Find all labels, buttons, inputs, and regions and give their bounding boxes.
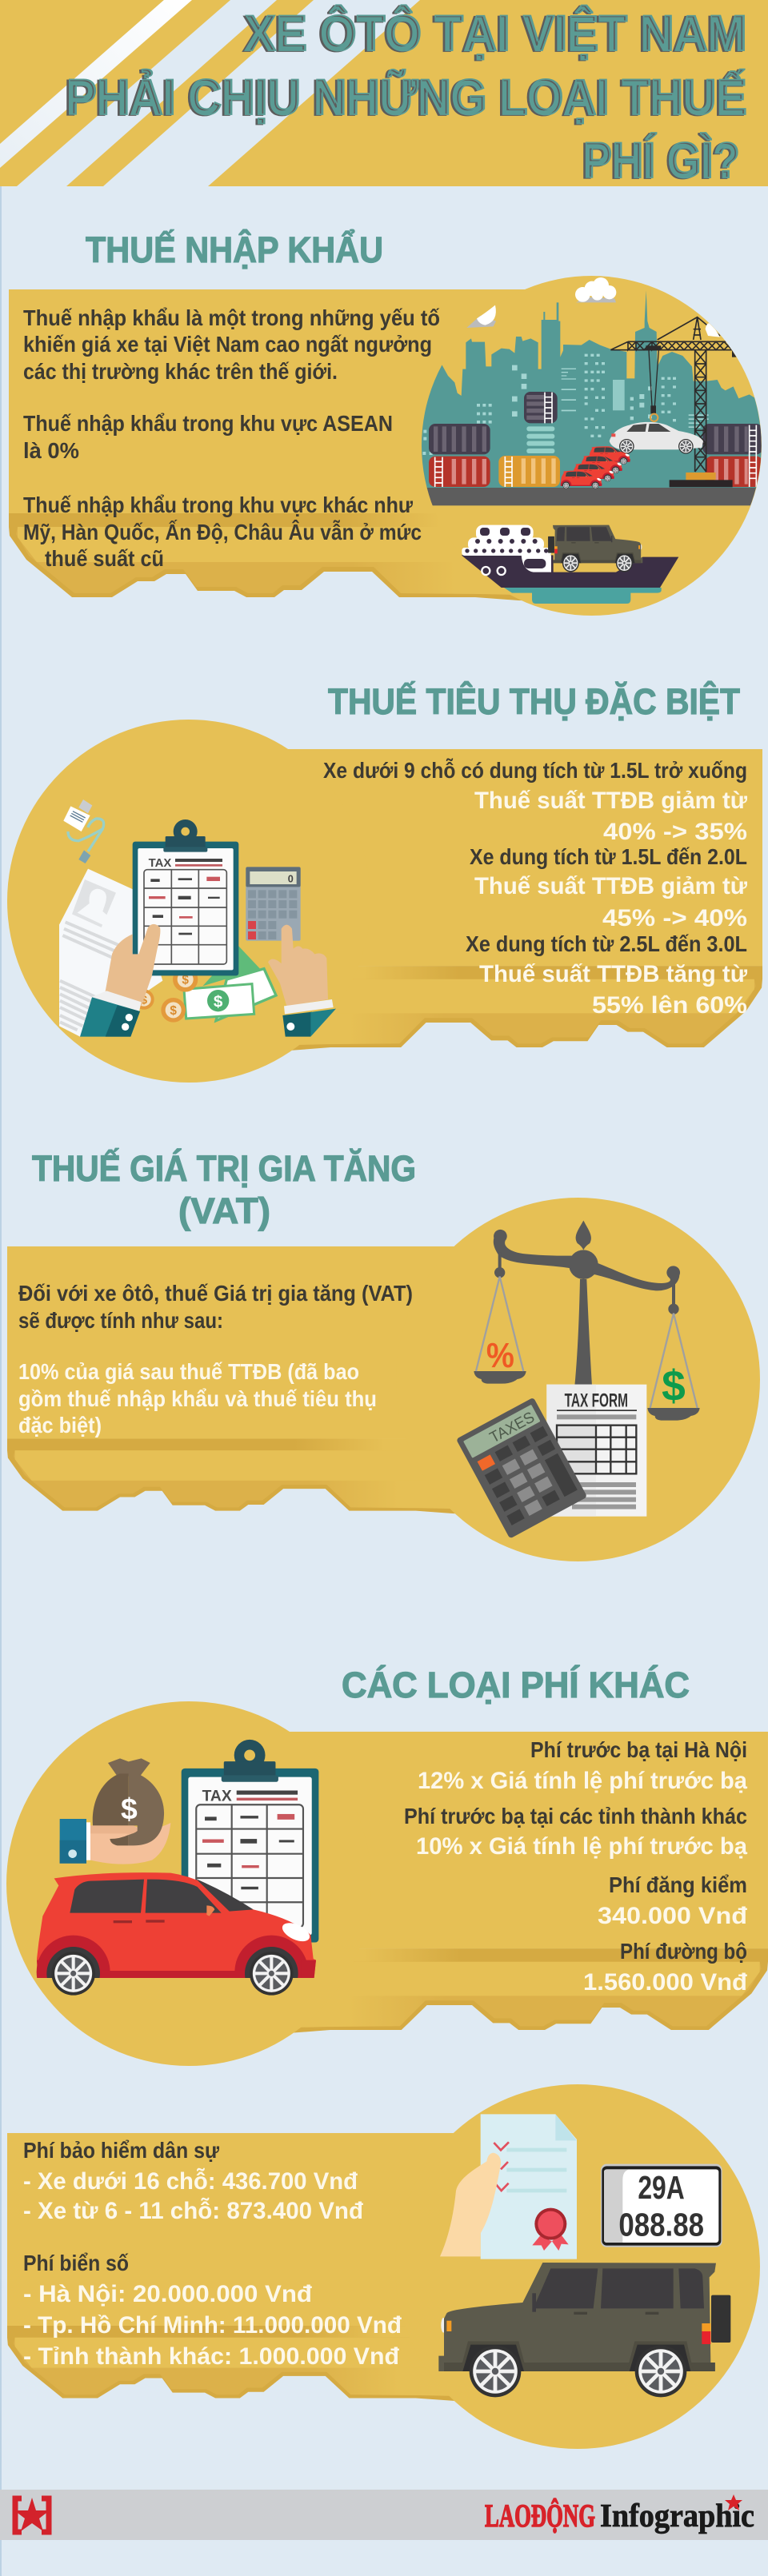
text: các loại phí khác: Phí đăng kiểm (609, 1872, 747, 1897)
text: phí bảo hiểm và biển số: - Hà Nội: 20.000.000 Vnđ (23, 2281, 313, 2307)
icon: left hand in sleeve (80, 924, 160, 1037)
text: phí bảo hiểm và biển số: - Xe từ 6 - 11 chỗ: 873.400 Vnđ (23, 2197, 364, 2224)
icon: calculator (246, 867, 301, 941)
title (66, 5, 747, 189)
text: thuế giá trị gia tăng (18, 1281, 413, 1438)
panel: các loại phí khác key (6, 1701, 768, 2066)
text: các loại phí khác: 10% x Giá tính lệ phí trước bạ (416, 1833, 747, 1860)
text: thuế tiêu thụ đặc biệt: 55% lên 60% (592, 992, 747, 1019)
text: các loại phí khác: 340.000 Vnđ (598, 1903, 748, 1929)
text: thuế tiêu thụ đặc biệt (323, 758, 747, 1019)
text: thuế tiêu thụ đặc biệt: 45% -> 40% (602, 905, 747, 931)
panel: phí bảo hiểm và biển số key (7, 2084, 760, 2449)
logo text: Lao Động Infographic: Infographic (600, 2497, 754, 2534)
icon: taxes calculator: TAXES (487, 1409, 538, 1446)
illustration: port with city, crane, cars and ship (416, 277, 768, 604)
text: các loại phí khác (404, 1737, 748, 1996)
illustration: scale, tax form and calculator (456, 1221, 700, 1539)
text: thuế nhập khẩu (23, 305, 440, 571)
icon: licence plate 29A 088.88: 088.88 (618, 2207, 704, 2243)
text: phí bảo hiểm và biển số: - Xe dưới 16 chỗ: 436.700 Vnđ (23, 2167, 358, 2195)
icon: insurance certificate held in hand (440, 2114, 577, 2259)
text: phí bảo hiểm và biển số: - Tp. Hồ Chí Minh: 11.000.000 Vnđ (23, 2312, 402, 2339)
text: thuế nhập khẩu: Mỹ, Hàn Quốc, Ấn Độ, Châu Âu vẫn ở mức (23, 520, 422, 544)
text: thuế giá trị gia tăng: sẽ được tính như sau: (18, 1308, 223, 1333)
icon: tax clipboard (133, 819, 238, 975)
logo text: Lao Động Infographic (485, 2494, 754, 2534)
text: các loại phí khác: Phí trước bạ tại các tỉnh thành khác (404, 1804, 747, 1828)
icon: right hand pointing (268, 925, 336, 1037)
icon: tax form (546, 1385, 646, 1517)
text: các loại phí khác: 12% x Giá tính lệ phí trước bạ (418, 1768, 747, 1794)
panel: thuế nhập khẩu key (9, 276, 768, 616)
icon: ship carrying jeep (462, 525, 678, 604)
heading: thuế giá trị gia tăng: THUẾ GIÁ TRỊ GIA TĂNG (32, 1148, 416, 1189)
illustration: scale, tax form and calculator: % (486, 1337, 514, 1375)
icon: row of red cars (561, 446, 630, 491)
text: phí bảo hiểm và biển số (23, 2138, 402, 2370)
text: thuế tiêu thụ đặc biệt: 40% -> 35% (603, 819, 747, 845)
icon: usb cable (63, 800, 104, 863)
footer band (0, 2490, 768, 2540)
icon: banknotes: $ (214, 992, 223, 1011)
text: phí bảo hiểm và biển số: Phí bảo hiểm dân sự (23, 2138, 219, 2163)
icon: gold coins: $ (141, 994, 147, 1007)
text: thuế giá trị gia tăng: đặc biệt) (18, 1413, 102, 1438)
heading: các loại phí khác: CÁC LOẠI PHÍ KHÁC (342, 1665, 690, 1705)
panel: thuế tiêu thụ đặc biệt key (7, 720, 762, 1083)
icon: white car on hook (610, 422, 703, 454)
text: thuế giá trị gia tăng: Đối với xe ôtô, thuế Giá trị gia tăng (VAT) (18, 1281, 413, 1306)
icon: tax clipboard (182, 1740, 318, 1942)
text: thuế tiêu thụ đặc biệt: Xe dung tích từ 1.5L đến 2.0L (470, 844, 747, 869)
illustration: certificate, licence plate and jeep (438, 2114, 730, 2397)
text: thuế nhập khẩu: thuế suất cũ (45, 546, 164, 571)
heading: thuế giá trị gia tăng (32, 1148, 416, 1231)
icon: hand holding money bag (60, 1758, 170, 1864)
text: các loại phí khác: Phí đường bộ (620, 1939, 747, 1964)
icon: jeep (438, 2263, 730, 2397)
text: phí bảo hiểm và biển số: Phí biển số (23, 2251, 129, 2275)
illustration: scale, tax form and calculator: $ (662, 1363, 686, 1410)
icon: red star logo (14, 2498, 50, 2532)
icon: hand holding money bag: $ (121, 1792, 138, 1825)
icon: licence plate 29A 088.88 (601, 2164, 722, 2247)
text: thuế nhập khẩu: các thị trường khác trên thế giới. (23, 359, 338, 384)
icon: taxes calculator (456, 1398, 587, 1539)
text: thuế giá trị gia tăng: gồm thuế nhập khẩu và thuế tiêu thụ (18, 1386, 377, 1411)
logo text: Lao Động Infographic: LAOĐỘNG (485, 2498, 595, 2534)
illustration: money bag, tax clipboard and red car (37, 1740, 318, 2009)
text: các loại phí khác: Phí trước bạ tại Hà Nội (530, 1737, 747, 1762)
title: PHÍ GÌ? (583, 133, 740, 189)
text: thuế tiêu thụ đặc biệt: Thuế suất TTĐB giảm từ (474, 788, 747, 814)
text: các loại phí khác: 1.560.000 Vnđ (583, 1969, 748, 1996)
text: thuế nhập khẩu: Thuế nhập khẩu trong khu vực ASEAN (23, 411, 393, 436)
heading: thuế giá trị gia tăng: (VAT) (178, 1190, 270, 1231)
icon: tax form: TAX FORM (565, 1390, 628, 1411)
illustration: tax form, calculator, money and hands (59, 800, 336, 1037)
text: thuế tiêu thụ đặc biệt: Xe dung tích từ 2.5L đến 3.0L (466, 931, 747, 956)
icon: licence plate 29A 088.88: 29A (638, 2169, 685, 2206)
icon: gold coins: $ (170, 1004, 177, 1018)
text: thuế nhập khẩu: Thuế nhập khẩu là một trong những yếu tố (23, 305, 440, 330)
text: thuế nhập khẩu: khiến giá xe tại Việt Nam cao ngất ngưởng (23, 332, 432, 357)
heading: thuế nhập khẩu: THUẾ NHẬP KHẨU (86, 229, 383, 270)
icon: calculator: 0 (288, 873, 294, 884)
text: thuế nhập khẩu: Thuế nhập khẩu trong khu vực khác như (23, 492, 413, 517)
header banner with diagonal stripes (0, 0, 768, 186)
text: thuế nhập khẩu: là 0% (23, 438, 79, 463)
icon: banknotes (184, 946, 276, 1021)
icon: balance scale (474, 1221, 700, 1421)
panel: thuế giá trị gia tăng key (7, 1198, 760, 1561)
icon: gold coins: $ (182, 974, 189, 987)
text: thuế tiêu thụ đặc biệt: Thuế suất TTĐB tăng từ (479, 961, 747, 987)
text: phí bảo hiểm và biển số: - Tỉnh thành khác: 1.000.000 Vnđ (23, 2343, 400, 2370)
icon: gold coins (134, 967, 198, 1023)
icon: clouds (466, 277, 616, 328)
text: thuế tiêu thụ đặc biệt: Thuế suất TTĐB giảm từ (474, 873, 747, 899)
icon: red car (37, 1872, 316, 2009)
icon: paper document stack (59, 869, 162, 1037)
icon: tower crane (610, 317, 736, 472)
text: thuế giá trị gia tăng: 10% của giá sau thuế TTĐB (đã bao (18, 1359, 359, 1384)
